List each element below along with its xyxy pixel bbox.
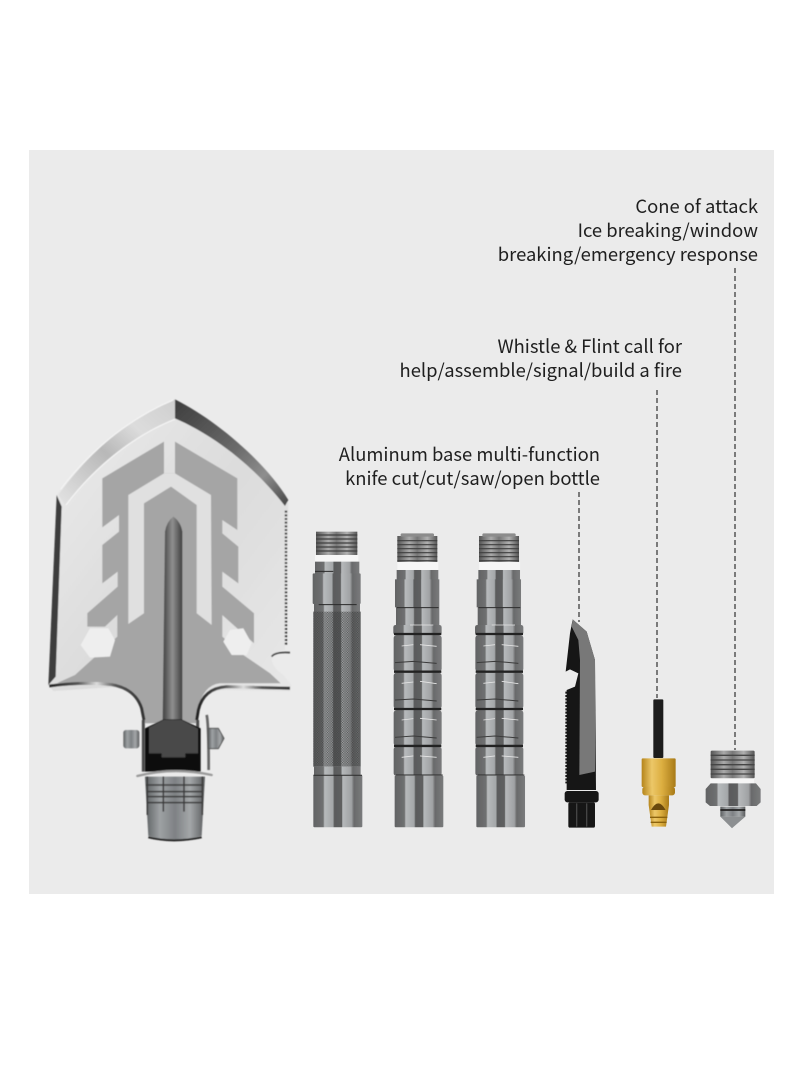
label: aluminum base knife: knife cut/cut/saw/open bottle [345, 465, 600, 491]
black bracket [145, 719, 201, 772]
collar [315, 562, 359, 574]
emblem [57, 442, 281, 723]
label: cone of attack: Cone of attack [635, 193, 758, 219]
flint rod [653, 699, 663, 758]
knife [565, 619, 599, 828]
label: cone of attack [498, 193, 758, 267]
bottom edge highlights [49, 683, 144, 720]
shovel neck and folding bracket [123, 715, 224, 840]
handle socket [145, 777, 205, 840]
emblem light chevron [128, 473, 212, 625]
ribbed handle tube 2 [475, 533, 525, 827]
knife blade [566, 619, 596, 790]
label: cone of attack: breaking/emergency response [498, 241, 758, 267]
central groove [163, 517, 182, 723]
whistle and flint [642, 699, 676, 827]
label: whistle and flint: Whistle & Flint call for [497, 333, 683, 359]
cone head [706, 751, 761, 828]
cone white band [710, 778, 754, 784]
collar ring [137, 771, 212, 776]
cone thread [711, 751, 755, 778]
knife bevel [572, 619, 595, 775]
right hexagon [223, 628, 252, 655]
upper right bevel [175, 399, 288, 506]
label: aluminum base knife: Aluminum base multi-function [339, 441, 600, 467]
left bolt [123, 730, 139, 748]
left edge [48, 495, 62, 685]
label: whistle and flint [400, 333, 683, 383]
label: aluminum base knife [339, 441, 600, 491]
right bolt [208, 728, 224, 749]
lower body [314, 767, 361, 775]
cone hex nut [706, 783, 761, 806]
side rails [143, 720, 198, 772]
shovel [48, 399, 292, 840]
knurled handle tube [313, 532, 362, 827]
serrated edge [282, 511, 289, 646]
label: whistle and flint: help/assemble/signal/build a fire [400, 357, 682, 383]
upper body [313, 573, 361, 604]
thread [316, 532, 357, 555]
serrations [563, 692, 571, 783]
label: cone of attack: Ice breaking/window [578, 217, 758, 243]
blade [48, 399, 292, 723]
blade silhouette [48, 399, 292, 723]
dashed line: knife [578, 492, 580, 622]
white band [315, 555, 358, 562]
cone neck [720, 807, 745, 817]
whistle hole [651, 803, 666, 810]
left hexagon [81, 628, 115, 658]
background panel [29, 150, 774, 894]
cone tip [720, 817, 745, 828]
dashed line: cone [734, 268, 736, 750]
upper left bevel [58, 399, 175, 505]
gold body [642, 758, 676, 787]
bevel highlight lines [61, 400, 175, 505]
dashed line: whistle [656, 390, 658, 698]
ribbed handle tube 1 [393, 533, 443, 827]
socket grooves [146, 777, 203, 815]
knurled grip [313, 612, 361, 767]
knife hilt [565, 791, 599, 802]
